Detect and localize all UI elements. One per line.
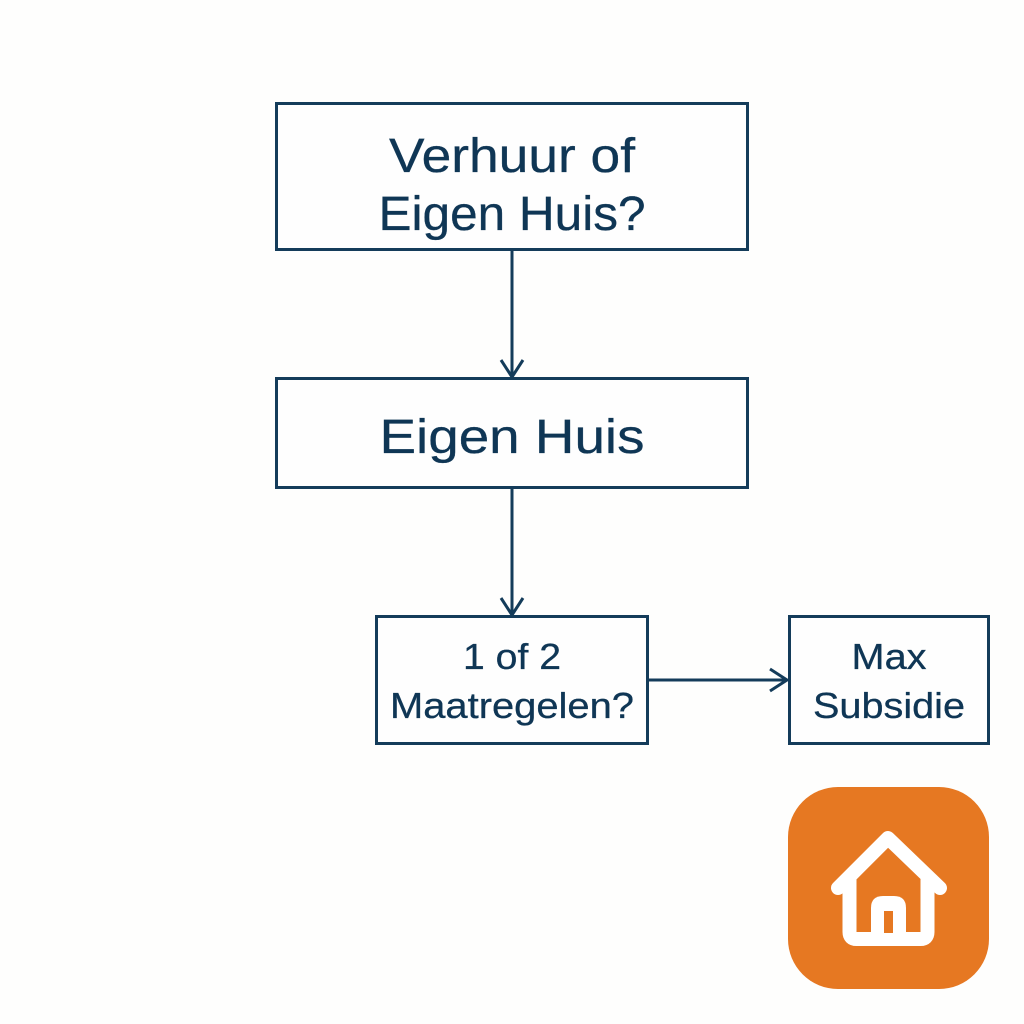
- box: Eigen Huis: Eigen Huis: [380, 411, 644, 464]
- box: 1 of 2 Maatregelen?: [376, 616, 648, 744]
- box: Max Subsidie: [790, 616, 988, 744]
- icon: orange house tile: [788, 787, 989, 989]
- box: Verhuur of Eigen Huis?: Eigen Huis?: [378, 188, 646, 241]
- box: 1 of 2 Maatregelen?: 1 of 2: [463, 636, 561, 677]
- box: Verhuur of Eigen Huis?: Verhuur of: [389, 130, 636, 183]
- arrow: second to third box: [501, 488, 523, 615]
- box: 1 of 2 Maatregelen?: Maatregelen?: [390, 685, 634, 726]
- box: Max Subsidie: Max: [852, 636, 926, 677]
- box: Max Subsidie: Subsidie: [813, 685, 965, 726]
- box: Eigen Huis: [276, 378, 748, 488]
- box: Verhuur of Eigen Huis?: [276, 104, 748, 250]
- arrow: first to second box: [501, 250, 523, 377]
- arrow: third box to Max Subsidie: [648, 669, 787, 691]
